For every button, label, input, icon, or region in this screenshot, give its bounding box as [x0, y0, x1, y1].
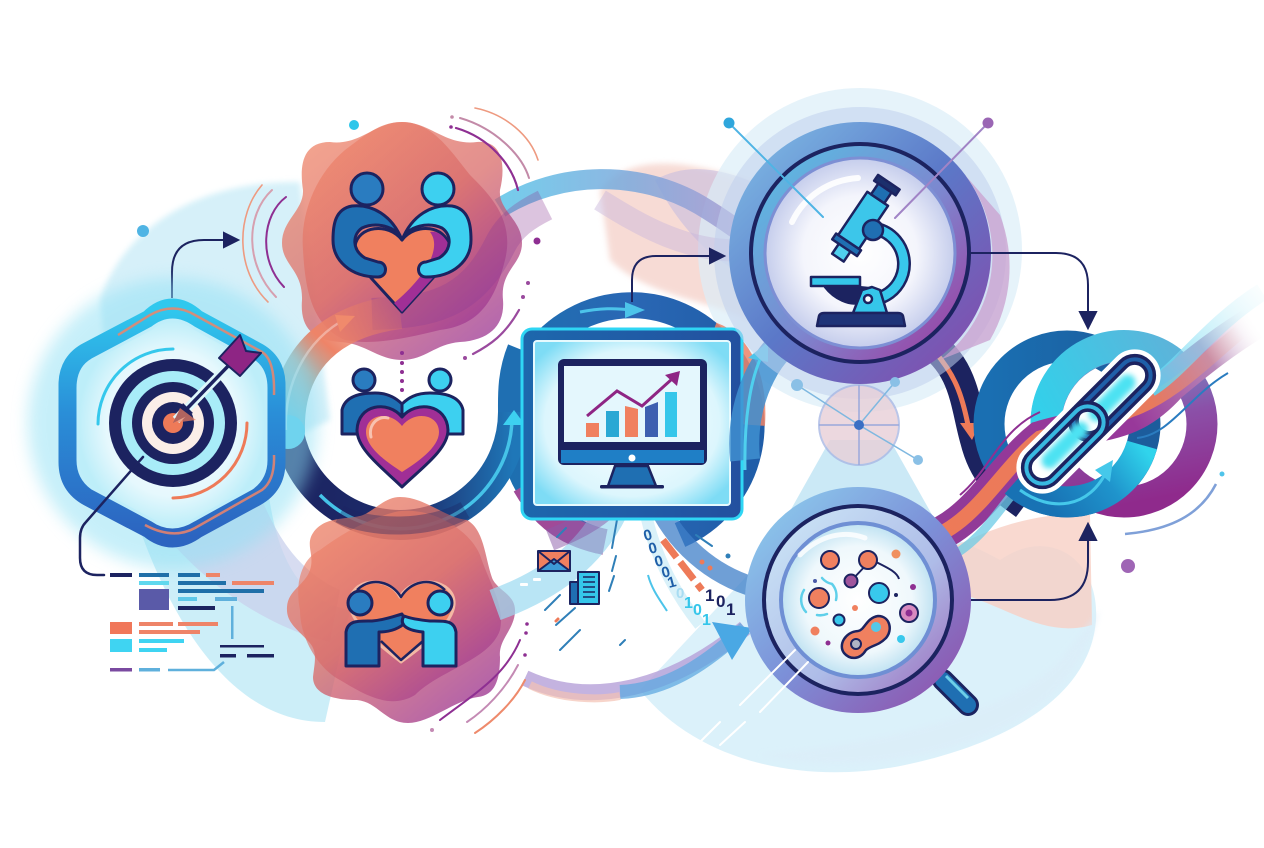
band overlay across blob — [372, 205, 545, 314]
icon: embracing people — [346, 582, 456, 666]
magnifier — [745, 487, 975, 713]
arrow: navy band microscope to chain — [925, 340, 1025, 505]
icon: monitor panel — [522, 329, 742, 519]
ring around central heart — [287, 350, 525, 529]
ribbon: top band from hearts to microscope — [500, 179, 765, 251]
binary digits stream: 101 — [705, 586, 735, 619]
arrow: rising cyan to orange — [271, 312, 400, 449]
ribbon: wave through chain — [925, 292, 1262, 560]
icon: central people and heart — [342, 369, 463, 487]
arrow: to microscope — [632, 249, 724, 302]
arrow: magnifier to chain — [953, 524, 1096, 600]
binary digits stream: 101 — [684, 595, 711, 629]
chain ring front arc — [1015, 445, 1142, 504]
icon: microscope — [811, 174, 905, 326]
ripple arcs: top right of top blob — [349, 108, 540, 360]
arrow: microscope to chain — [970, 253, 1096, 328]
ring around monitor — [512, 302, 752, 542]
chain rings — [989, 345, 1202, 502]
icon: chain link — [1020, 353, 1157, 490]
ripple lines below bottom blob — [430, 622, 529, 733]
microscope lens — [714, 107, 1010, 399]
ribbon rising to microscope — [744, 338, 790, 470]
binary digits stream — [642, 526, 735, 629]
bar chart with trend arrow — [586, 371, 680, 437]
data list rows — [110, 573, 274, 672]
crosshair node — [791, 377, 923, 465]
pointer lines with dots — [724, 118, 994, 218]
blob: bottom heart — [287, 497, 515, 723]
target rings — [109, 359, 237, 487]
light rays on magnifier — [700, 650, 808, 745]
binary digits stream: 0 — [676, 585, 684, 602]
icon: envelope — [538, 551, 570, 571]
icon: top people holding heart — [333, 173, 471, 312]
connector: target to data list — [80, 457, 143, 575]
microbes in lens — [801, 550, 918, 658]
arrow: hexagon to hearts — [172, 233, 238, 298]
binary digits stream: 00001 — [642, 526, 678, 592]
icon: arrow into target — [173, 335, 261, 423]
monitor device — [558, 359, 707, 488]
ribbon: lower arc to magnifier — [525, 622, 752, 698]
dotted connector between hearts — [400, 351, 404, 392]
streams out of monitor — [495, 505, 765, 650]
ripple arcs: left of top blob — [137, 185, 286, 302]
icon: document — [570, 572, 599, 604]
background wash — [100, 88, 1100, 772]
hexagon target panel — [28, 278, 318, 568]
blob: top heart — [282, 122, 545, 360]
ring overlap on bottom blob — [340, 510, 465, 526]
orange accent edges — [118, 308, 274, 533]
